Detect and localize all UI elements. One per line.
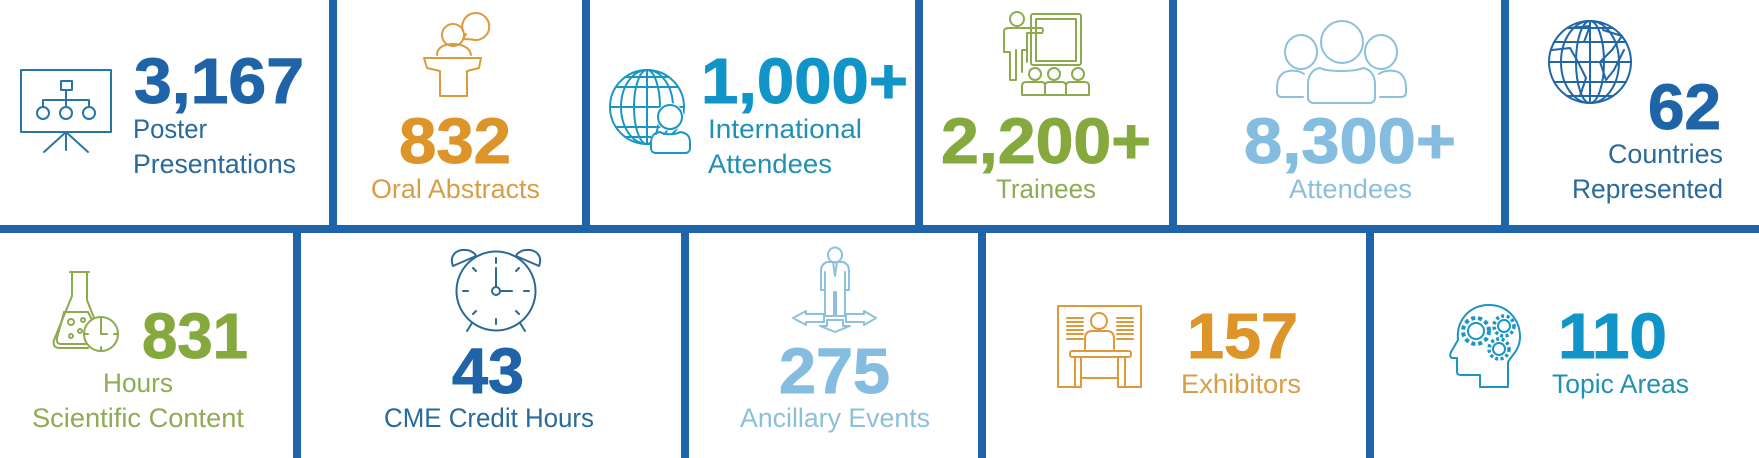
label: Presentations [133,149,296,179]
panel: scientific content hours [32,272,248,433]
panel: ancillary events [740,248,930,433]
label: Attendees [1289,174,1412,204]
panel: international attendees [610,45,908,179]
label [708,114,862,179]
label: Ancillary Events [740,403,930,433]
label [133,114,296,179]
label: Oral Abstracts [371,174,540,204]
stat number: 110 [1558,300,1667,372]
label: Represented [1572,174,1723,204]
panel: attendees [1244,21,1456,204]
stat number: 43 [452,335,524,407]
icon: world globe [1549,21,1631,103]
icon: podium speaker [424,13,489,96]
panel: exhibitors [1058,300,1301,399]
icon: trainer at board with audience [1004,12,1089,95]
label: Topic Areas [1552,369,1689,399]
stat number: 2,200+ [941,105,1151,177]
label: Scientific Content [32,403,245,433]
icon: globe with person [610,70,690,153]
stat number: 831 [142,300,248,372]
icon: alarm clock [452,250,540,331]
label [1572,139,1723,204]
stat number: 1,000+ [701,45,908,117]
stat number: 157 [1187,300,1298,372]
icon: flask and clock [54,272,118,351]
stat number: 62 [1648,71,1721,143]
label: Poster [133,114,207,144]
label: Hours [103,368,173,398]
icon: group of people [1277,21,1406,103]
stat number: 275 [779,335,890,407]
panel: trainees [941,12,1151,204]
icon: person with direction arrows [793,248,876,332]
panel: oral abstracts [371,13,540,204]
label: Exhibitors [1181,369,1301,399]
panel: poster presentations [21,45,304,179]
stat number: 832 [399,105,511,177]
label [32,368,245,433]
panel: countries represented [1549,21,1723,204]
icon: exhibitor booth [1058,306,1141,387]
panel: topic areas [1450,300,1689,399]
label: Countries [1608,139,1723,169]
panel: CME credit hours [384,250,594,433]
label: Attendees [708,149,832,179]
label: Trainees [996,174,1096,204]
icon: presentation board [21,70,111,152]
label: International [708,114,862,144]
stat number: 8,300+ [1244,105,1456,177]
icon: head with gears [1450,305,1520,387]
stat number: 3,167 [134,45,304,117]
label: CME Credit Hours [384,403,594,433]
